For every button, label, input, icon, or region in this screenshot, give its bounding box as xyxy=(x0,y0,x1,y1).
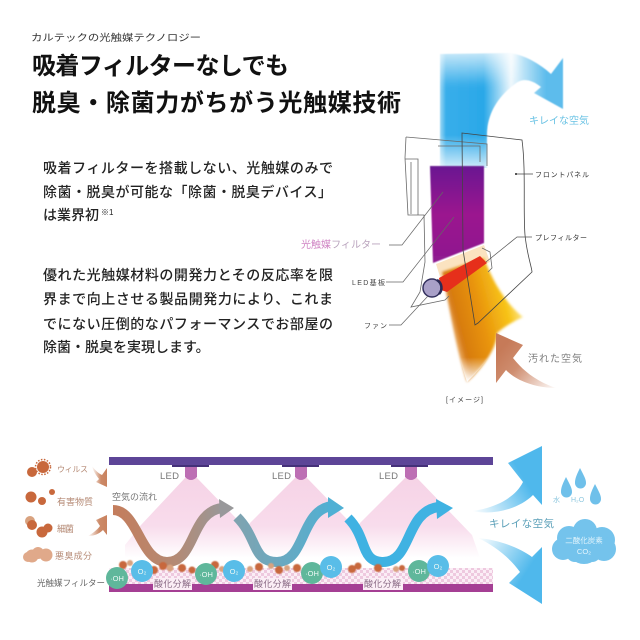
clean air stream with arrow xyxy=(430,40,563,167)
pollutant particles xyxy=(119,560,405,574)
label: clean air: キレイな空気 xyxy=(529,114,589,127)
icon: water drops: H₂O xyxy=(571,497,585,504)
legend: odor components: 悪臭成分 xyxy=(55,550,92,561)
filter base xyxy=(109,568,493,592)
label: LED board xyxy=(352,217,454,287)
text block: description xyxy=(43,267,333,355)
icon: water drops xyxy=(553,468,601,504)
icon: CO2 cloud: CO₂ xyxy=(577,547,591,556)
arrow: pollutants in (lower) xyxy=(88,515,107,536)
icon: CO2 cloud xyxy=(552,519,616,564)
label: photocatalyst filter: 光触媒フィルター xyxy=(37,578,105,588)
icon: water drops: 水 xyxy=(553,495,560,504)
legend: virus: ウィルス xyxy=(57,465,88,474)
OH and O2 molecules: ·OH xyxy=(199,570,213,579)
OH and O2 molecules: O₂ xyxy=(138,567,146,576)
LED units: LED xyxy=(160,471,179,482)
eyebrow heading: カルテックの光触媒テクノロジー xyxy=(31,32,201,44)
OH and O2 molecules xyxy=(106,555,449,589)
label: photocatalyst filter xyxy=(301,192,443,251)
text block: description: でにない圧倒的なパフォーマンスでお部屋の xyxy=(43,316,333,332)
fan xyxy=(423,279,441,297)
LED units: LED xyxy=(272,471,291,482)
text block: description: 界まで向上させる製品開発力により、これま xyxy=(43,291,333,307)
OH and O2 molecules: ·OH xyxy=(305,569,319,578)
label: clean air: キレイな空気 xyxy=(489,517,554,530)
label: fan: ファン xyxy=(364,322,387,330)
label: photocatalyst filter: 光触媒フィルター xyxy=(301,238,381,251)
arrow: airflow 2 xyxy=(237,497,344,562)
text block: intro xyxy=(43,160,333,223)
title: 脱臭・除菌力がちがう光触媒技術 xyxy=(32,89,401,117)
legend: harmful substances xyxy=(26,489,93,507)
text block: intro: は業界初 xyxy=(43,207,99,223)
oxidation labels: 酸化分解 xyxy=(364,578,401,589)
OH and O2 molecules: O₂ xyxy=(327,563,335,572)
OH and O2 molecules: O₂ xyxy=(434,562,442,571)
title xyxy=(32,53,401,117)
text block: intro: 吸着フィルターを搭載しない、光触媒のみで xyxy=(43,160,333,176)
arrow: dirty air xyxy=(496,333,556,388)
legend: bacteria: 細菌 xyxy=(57,523,74,534)
label: front panel: フロントパネル xyxy=(535,171,589,179)
OH and O2 molecules: O₂ xyxy=(230,567,238,576)
oxidation labels: 酸化分解 xyxy=(254,578,291,589)
legend: harmful substances: 有害物質 xyxy=(57,496,93,507)
text block: intro: ※1 xyxy=(101,208,114,217)
label: pre-filter: プレフィルター xyxy=(535,233,587,242)
label: airflow: 空気の流れ xyxy=(112,491,157,502)
title: 吸着フィルターなしでも xyxy=(32,53,289,80)
text block: description: 優れた光触媒材料の開発力とその反応率を限 xyxy=(43,267,333,283)
LED units: LED xyxy=(379,471,398,482)
label: pre-filter xyxy=(486,233,587,262)
label: LED board: LED基板 xyxy=(352,278,385,287)
top bar xyxy=(109,457,493,465)
text block: intro: 除菌・脱臭が可能な「除菌・脱臭デバイス」 xyxy=(43,184,332,200)
legend: bacteria xyxy=(25,516,74,538)
arrow: clean air down xyxy=(478,538,542,604)
reaction chamber diagram xyxy=(106,457,493,592)
arrow: airflow 1 xyxy=(113,499,234,562)
arrow: clean air up xyxy=(472,446,542,513)
icon: CO2 cloud: 二酸化炭素 xyxy=(565,535,603,545)
dirty air stream xyxy=(436,245,523,382)
label: dirty air: 汚れた空気 xyxy=(528,352,582,365)
label: fan xyxy=(364,296,428,330)
LED units xyxy=(125,465,480,558)
label: front panel xyxy=(515,171,589,179)
OH and O2 molecules: ·OH xyxy=(110,574,124,583)
photocatalyst filter block xyxy=(430,166,484,263)
arrow: pollutants in (upper) xyxy=(92,466,107,487)
legend: odor components xyxy=(23,547,92,562)
label: image note: [イメージ] xyxy=(446,397,483,404)
arrow: airflow 3 xyxy=(348,499,453,562)
OH and O2 molecules: ·OH xyxy=(412,567,426,576)
oxidation labels xyxy=(153,578,403,590)
device diagram xyxy=(301,40,589,404)
legend: virus xyxy=(27,460,88,477)
device outline xyxy=(405,133,532,325)
text block: description: 除菌・脱臭を実現します。 xyxy=(43,339,210,355)
oxidation labels: 酸化分解 xyxy=(154,578,191,589)
red LED board xyxy=(439,256,487,292)
